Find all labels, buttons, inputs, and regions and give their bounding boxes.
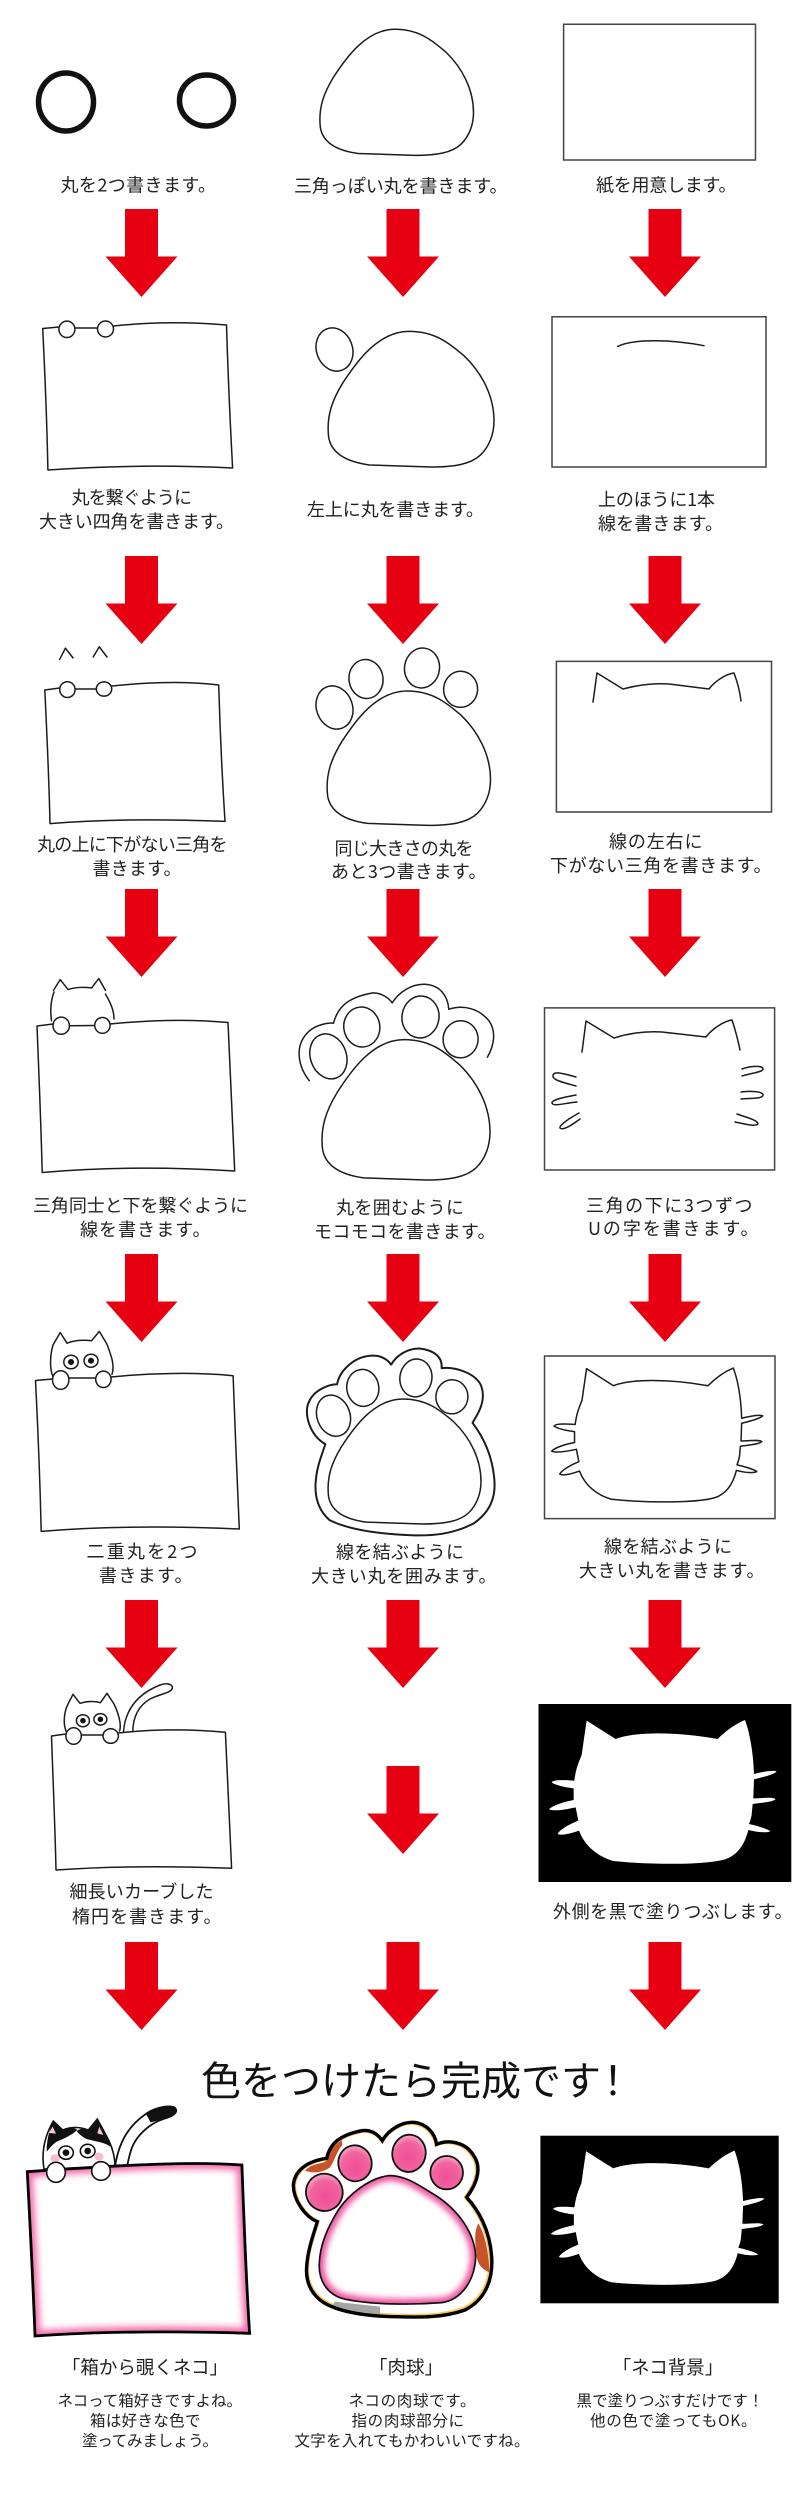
arrow [629, 889, 701, 977]
arrow [106, 1942, 178, 2030]
caption: 書きます。 [92, 855, 182, 881]
step: box cat, eyes [36, 1331, 239, 1588]
panel: finished paw [293, 2122, 530, 2451]
arrow [629, 1942, 701, 2030]
arrow [629, 1254, 701, 1342]
step: background cat, ears [550, 661, 772, 878]
panel: finished background cat [540, 2136, 779, 2431]
caption: 外側を黒で塗りつぶします。 [553, 1898, 792, 1924]
arrow [367, 889, 439, 977]
caption: 下がない三角を書きます。 [550, 852, 772, 878]
caption: 二重丸を2つ [86, 1538, 198, 1564]
caption: 同じ大きさの丸を [334, 835, 474, 861]
panel: finished box cat [27, 2106, 250, 2451]
description: ネコの肉球です。 [348, 2389, 476, 2411]
arrow [106, 1600, 178, 1688]
black panel with white cat [540, 2136, 779, 2303]
step: box cat, tail [52, 1684, 232, 1929]
drawing: box with ears [45, 647, 225, 824]
step: paw, egg shape [294, 29, 508, 198]
caption: 楕円を書きます。 [72, 1903, 222, 1929]
arrow [367, 556, 439, 644]
arrow [106, 209, 178, 297]
arrow [106, 1254, 178, 1342]
caption: 線を結ぶように [336, 1538, 464, 1564]
title: 「ネコ背景」 [613, 2354, 723, 2380]
arrow [367, 1766, 439, 1854]
drawing: paw with toes [310, 646, 490, 825]
drawing: box with cat and tail [52, 1684, 232, 1870]
arrow [106, 556, 178, 644]
arrow [367, 1942, 439, 2030]
drawing: frame with cat head [544, 1356, 775, 1519]
step: paw, four toes [310, 646, 490, 884]
caption: 丸を囲むように [336, 1194, 464, 1220]
description [294, 2389, 530, 2451]
caption: 線を書きます。 [80, 1216, 210, 1242]
description [576, 2389, 764, 2431]
description: 塗ってみましょう。 [82, 2429, 218, 2451]
caption: 紙を用意します。 [596, 172, 736, 198]
caption: 三角同士と下を繋ぐように [33, 1192, 248, 1218]
step: paw, first toe [307, 323, 494, 522]
step: paw, fluffy outline [299, 984, 496, 1244]
caption: 左上に丸を書きます。 [307, 496, 484, 522]
icon: cat tail [115, 2106, 176, 2167]
arrow [367, 1600, 439, 1688]
title: 「箱から覗くネコ」 [62, 2354, 228, 2380]
icon: cat paws [47, 2162, 110, 2182]
icon: paw main pad [319, 2176, 476, 2304]
step: paw, full outline [307, 1349, 496, 1588]
caption: 書きます。 [99, 1562, 192, 1588]
icon: colored paw [293, 2122, 492, 2317]
step: box cat, large rectangle [39, 321, 234, 534]
title: 「肉球」 [369, 2354, 443, 2380]
caption: 大きい丸を書きます。 [579, 1557, 764, 1583]
caption: 三角っぽい丸を書きます。 [294, 172, 508, 198]
description: 指の肉球部分に [352, 2409, 464, 2431]
caption: 細長いカーブした [70, 1878, 214, 1904]
step: background cat, whiskers [544, 1008, 775, 1241]
step: box cat, two circles [38, 73, 234, 198]
heading: 色をつけたら完成です！ [201, 2049, 633, 2107]
icon: cat head [43, 2119, 115, 2169]
caption: 線を結ぶように [604, 1533, 732, 1559]
arrow [367, 1254, 439, 1342]
drawing: box with two circles [43, 321, 233, 470]
arrow [629, 1600, 701, 1688]
icon: two rings [38, 73, 234, 131]
caption: 上のほうに1本 [598, 486, 715, 512]
step: background cat, paper [564, 24, 756, 197]
caption: 丸を2つ書きます。 [60, 172, 216, 198]
drawing: paper frame [564, 24, 756, 160]
drawing: frame with ears [556, 661, 772, 812]
step: box cat, head outline [33, 979, 248, 1242]
description: 黒で塗りつぶすだけです！ [576, 2389, 764, 2411]
drawing: black panel with white cat [538, 1704, 791, 1882]
description: 文字を入れてもかわいいですね。 [294, 2429, 530, 2451]
drawing: box with cat eyes [36, 1331, 239, 1531]
drawing: egg with toe [310, 323, 494, 467]
description: 他の色で塗ってもOK。 [590, 2409, 756, 2431]
arrow [629, 209, 701, 297]
description: ネコって箱好きですよね。 [58, 2389, 242, 2411]
arrow [106, 889, 178, 977]
caption: モコモコを書きます。 [314, 1218, 496, 1244]
drawing: frame with line [552, 317, 766, 467]
step: background cat, top line [552, 317, 766, 536]
drawing: paw with arc [299, 984, 494, 1180]
caption: 大きい丸を囲みます。 [311, 1562, 496, 1588]
caption: 線を書きます。 [598, 510, 723, 536]
drawing: egg [320, 29, 474, 155]
caption: 丸を繋ぐように [72, 484, 192, 510]
box with pink border [27, 2163, 250, 2336]
caption: 三角の下に3つずつ [586, 1192, 752, 1218]
arrow [367, 209, 439, 297]
description: 箱は好きな色で [90, 2409, 200, 2431]
step: background cat, black fill [538, 1704, 792, 1924]
drawing: box with head outline [37, 979, 235, 1172]
caption: あと3つ書きます。 [331, 858, 486, 884]
caption: 大きい四角を書きます。 [39, 508, 234, 534]
caption: 丸の上に下がない三角を [37, 831, 228, 857]
step: box cat, ears [37, 647, 228, 881]
arrow [629, 556, 701, 644]
caption: 線の左右に [609, 828, 702, 854]
description [58, 2389, 242, 2451]
caption: Uの字を書きます。 [588, 1215, 758, 1241]
drawing: frame with ears and whiskers [544, 1008, 775, 1170]
step: background cat, head outline [544, 1356, 775, 1583]
drawing: closed paw [307, 1349, 495, 1535]
